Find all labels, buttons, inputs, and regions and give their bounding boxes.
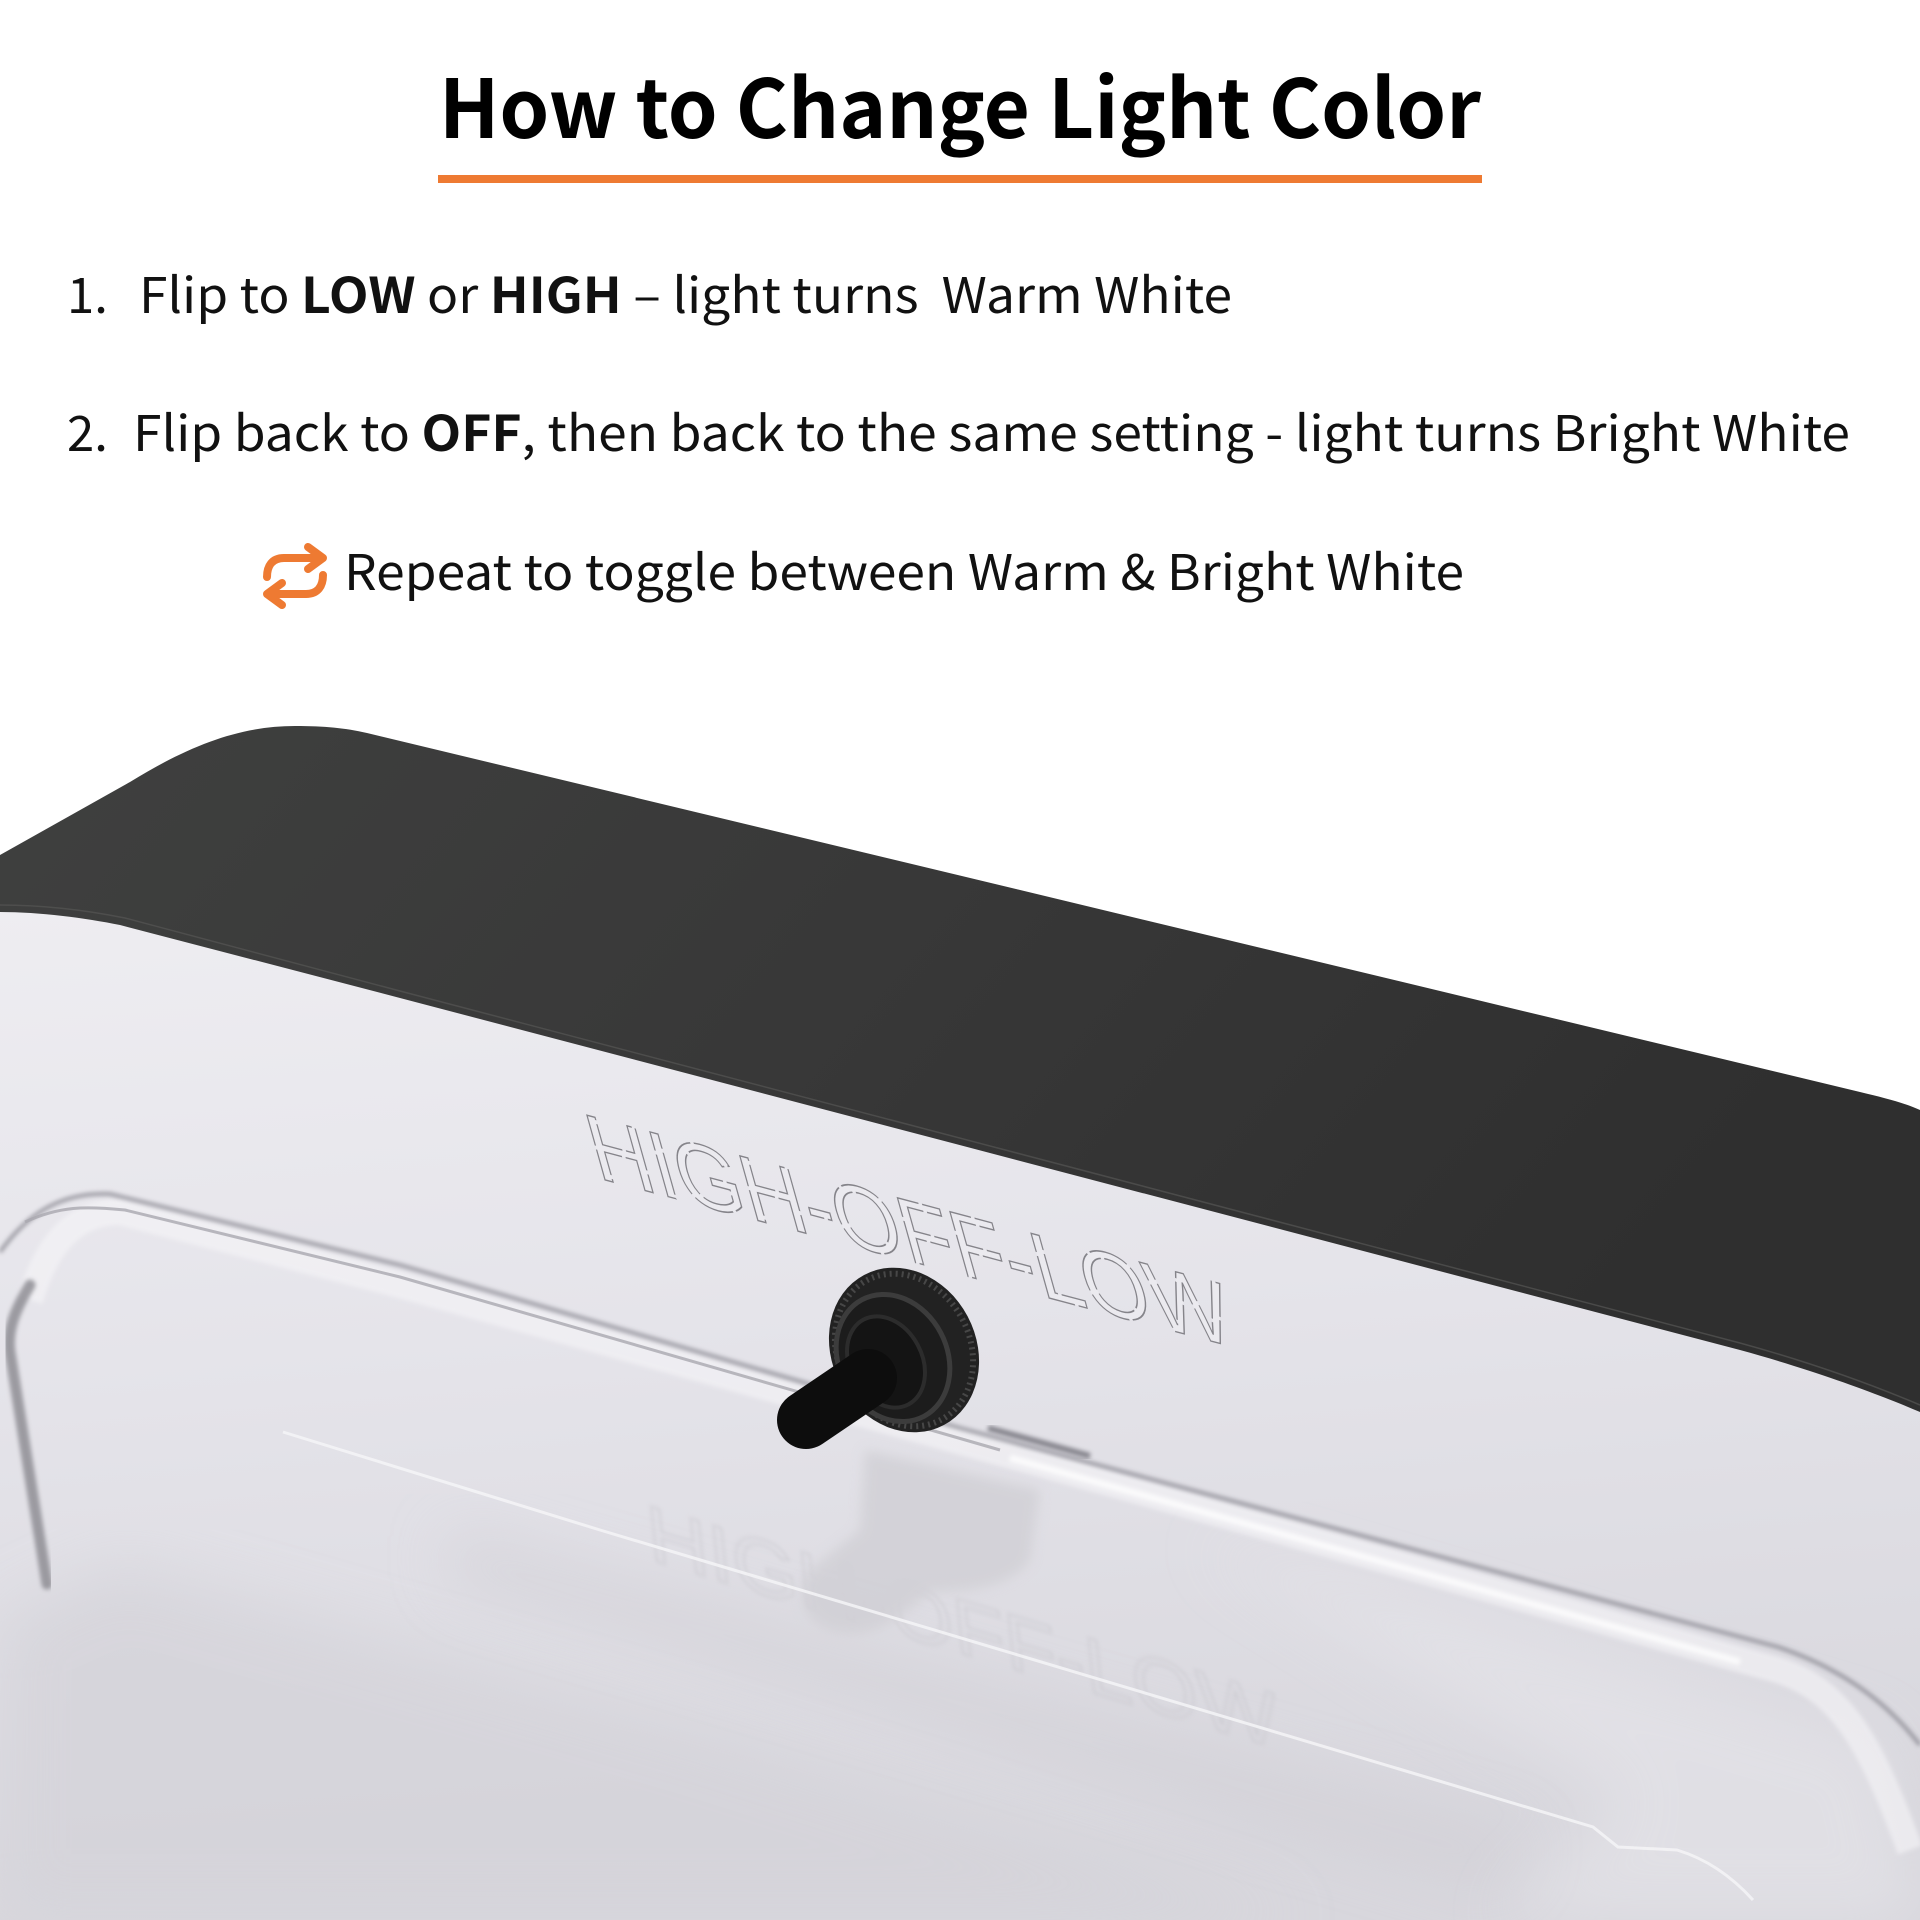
toggle switch [801, 1241, 1007, 1459]
reflected lettering: HIGH-OFF-LOW [643, 1489, 1282, 1767]
step 2 text: 2. [67, 395, 108, 466]
dark housing top [0, 726, 1920, 1412]
toggle nut [801, 1241, 1007, 1459]
product photo: light housing [0, 726, 1920, 1920]
housing seam line [0, 905, 1920, 1405]
toggle lever [806, 1378, 868, 1420]
step 1 text: 1. [67, 257, 108, 328]
step 2 text: Flip back to OFF, then back to the same setting - light turns Bright White [133, 395, 1850, 466]
lower lens reflection line [283, 1432, 1753, 1900]
icon: repeat arrows [267, 547, 323, 605]
toggle reflection [802, 1450, 1040, 1634]
toggle collar [814, 1274, 972, 1442]
lens left edge [9, 1285, 47, 1584]
housing face [0, 905, 1920, 1920]
repeat note text: Repeat to toggle between Warm & Bright White [344, 534, 1464, 605]
embossed lettering: HIGH-OFF-LOW [574, 1093, 1244, 1369]
title: How to Change Light Color [439, 45, 1482, 162]
lens outline [0, 1194, 1920, 1850]
lower lens shading [56, 1614, 1858, 1876]
step 1 text: Flip to LOW or HIGH – light turns Warm White [139, 257, 1232, 328]
